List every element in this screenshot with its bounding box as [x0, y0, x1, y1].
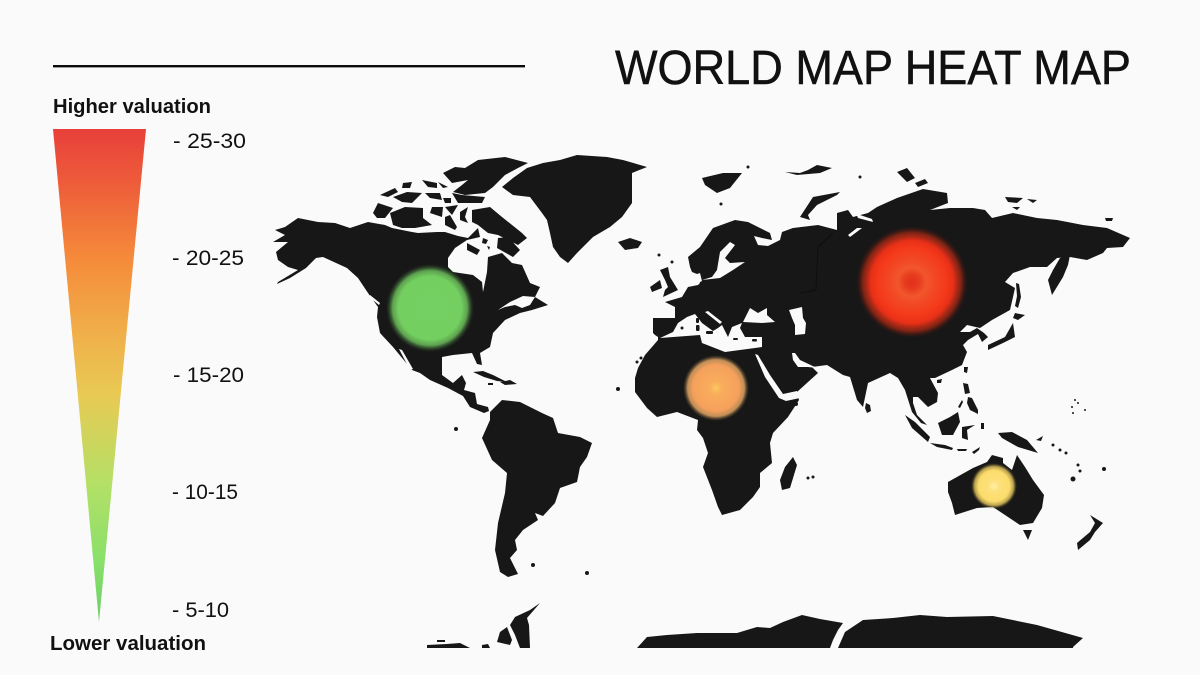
continents and islands — [273, 155, 1130, 648]
country border line — [800, 233, 833, 293]
small islands — [454, 166, 1106, 575]
caspian sea — [789, 307, 806, 335]
british isles — [650, 267, 678, 297]
range labels: - 20-25 — [172, 247, 244, 270]
southeast asian islands — [865, 367, 1043, 454]
pacific inlets — [353, 282, 380, 305]
south america — [482, 400, 592, 577]
heat spot: north america green — [386, 264, 474, 352]
north and central america — [273, 218, 548, 413]
legend heading: higher valuation: Higher valuation — [53, 96, 211, 118]
range labels: - 5-10 — [172, 599, 229, 622]
tasmania and new zealand — [1023, 515, 1103, 550]
legend heading: lower valuation: Lower valuation — [50, 633, 206, 655]
mediterranean sea — [660, 314, 762, 352]
heat spot: russia red — [856, 226, 968, 338]
gulf of saint lawrence — [498, 296, 535, 310]
world map — [273, 155, 1130, 648]
mediterranean islands — [680, 318, 757, 342]
heat spot: africa orange — [683, 355, 749, 421]
caribbean islands — [473, 371, 517, 385]
arctic islands of eurasia — [702, 165, 1113, 221]
kamchatka — [1048, 255, 1070, 295]
arctic inlets — [848, 211, 873, 237]
red sea and gulf of aden — [755, 354, 800, 401]
range labels: - 10-15 — [172, 481, 238, 504]
range labels: - 25-30 — [173, 130, 246, 153]
black sea — [743, 308, 775, 323]
heat spot: australia yellow — [971, 463, 1017, 509]
seas cut out of the continents — [353, 211, 873, 401]
baltic sea — [694, 242, 745, 283]
persian gulf — [792, 353, 817, 368]
range labels — [172, 130, 246, 622]
gulf of california — [399, 349, 413, 370]
greenland — [502, 155, 647, 263]
legend: valuation scale — [50, 96, 246, 655]
range labels: - 15-20 — [173, 364, 244, 387]
canadian arctic islands — [373, 157, 528, 257]
madagascar — [780, 457, 797, 490]
australia — [948, 455, 1044, 525]
adriatic sea — [705, 311, 722, 324]
antarctica — [427, 603, 1083, 648]
japan and sakhalin — [988, 283, 1025, 350]
eurasia and africa — [635, 189, 1130, 515]
title: WORLD MAP HEAT MAP — [615, 42, 1131, 95]
iceland — [618, 238, 642, 250]
header rule — [53, 65, 525, 67]
gradient triangle — [53, 129, 146, 622]
